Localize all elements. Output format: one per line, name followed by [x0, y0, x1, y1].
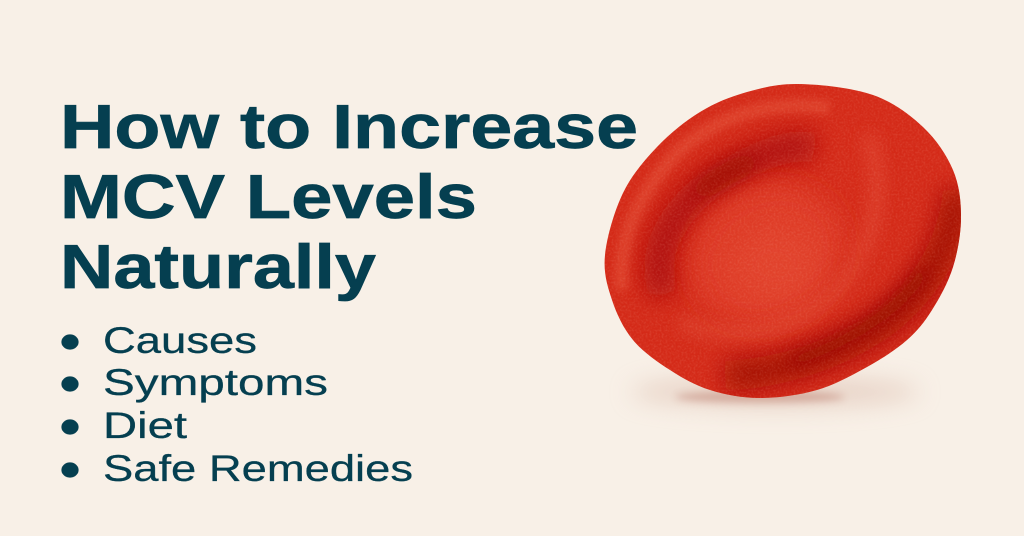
infographic canvas: [61, 84, 961, 482]
bullet: Symptoms: Symptoms: [103, 362, 328, 403]
cell shadow: [630, 376, 920, 408]
bullet: Safe Remedies: Safe Remedies: [103, 448, 413, 489]
lower-right dark band: [725, 190, 958, 376]
title: How to Increase: [60, 93, 638, 162]
outer rim highlight, upper left: [622, 106, 830, 290]
crater floor: [690, 180, 842, 322]
title: MCV Levels: [60, 163, 477, 232]
dark inner crater ring: [659, 147, 815, 295]
bullet: Causes: Causes: [103, 320, 257, 361]
bullet list: [62, 320, 413, 489]
surface grain: [595, 75, 970, 405]
bullet: Symptoms: [62, 362, 328, 403]
bullet: Causes: [62, 320, 257, 361]
bullet: Diet: [62, 405, 188, 446]
icon: red blood cell: [595, 75, 970, 405]
title: Naturally: [60, 233, 377, 302]
bullet: Diet: Diet: [103, 405, 188, 446]
title: [60, 93, 638, 302]
right and lower ring highlight: [680, 135, 877, 333]
